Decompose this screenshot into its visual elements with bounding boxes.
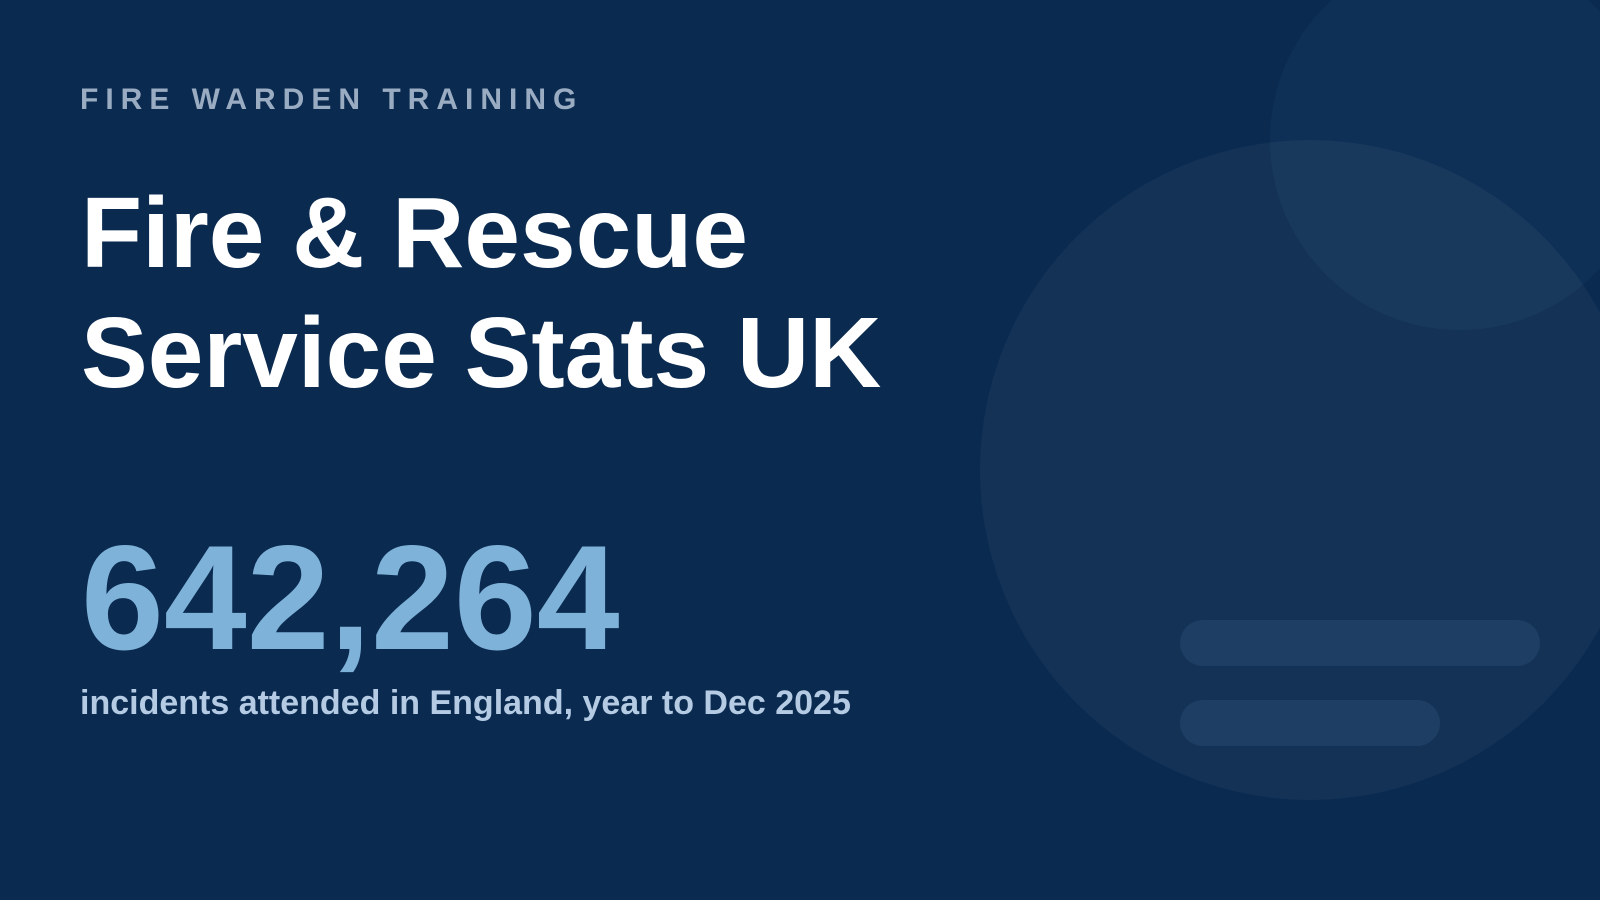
large circle: [980, 140, 1600, 800]
title: [81, 177, 881, 409]
title: Fire & Rescue: [81, 177, 748, 289]
title: Service Stats UK: [81, 297, 881, 409]
upper pill bar: [1180, 620, 1540, 666]
number caption: incidents attended in England, year to Dec 2025: [80, 684, 851, 722]
lower pill bar: [1180, 700, 1440, 746]
top right circle: [1270, 0, 1600, 330]
key number: 642,264: [81, 514, 620, 681]
eyebrow label: FIRE WARDEN TRAINING: [80, 83, 583, 116]
